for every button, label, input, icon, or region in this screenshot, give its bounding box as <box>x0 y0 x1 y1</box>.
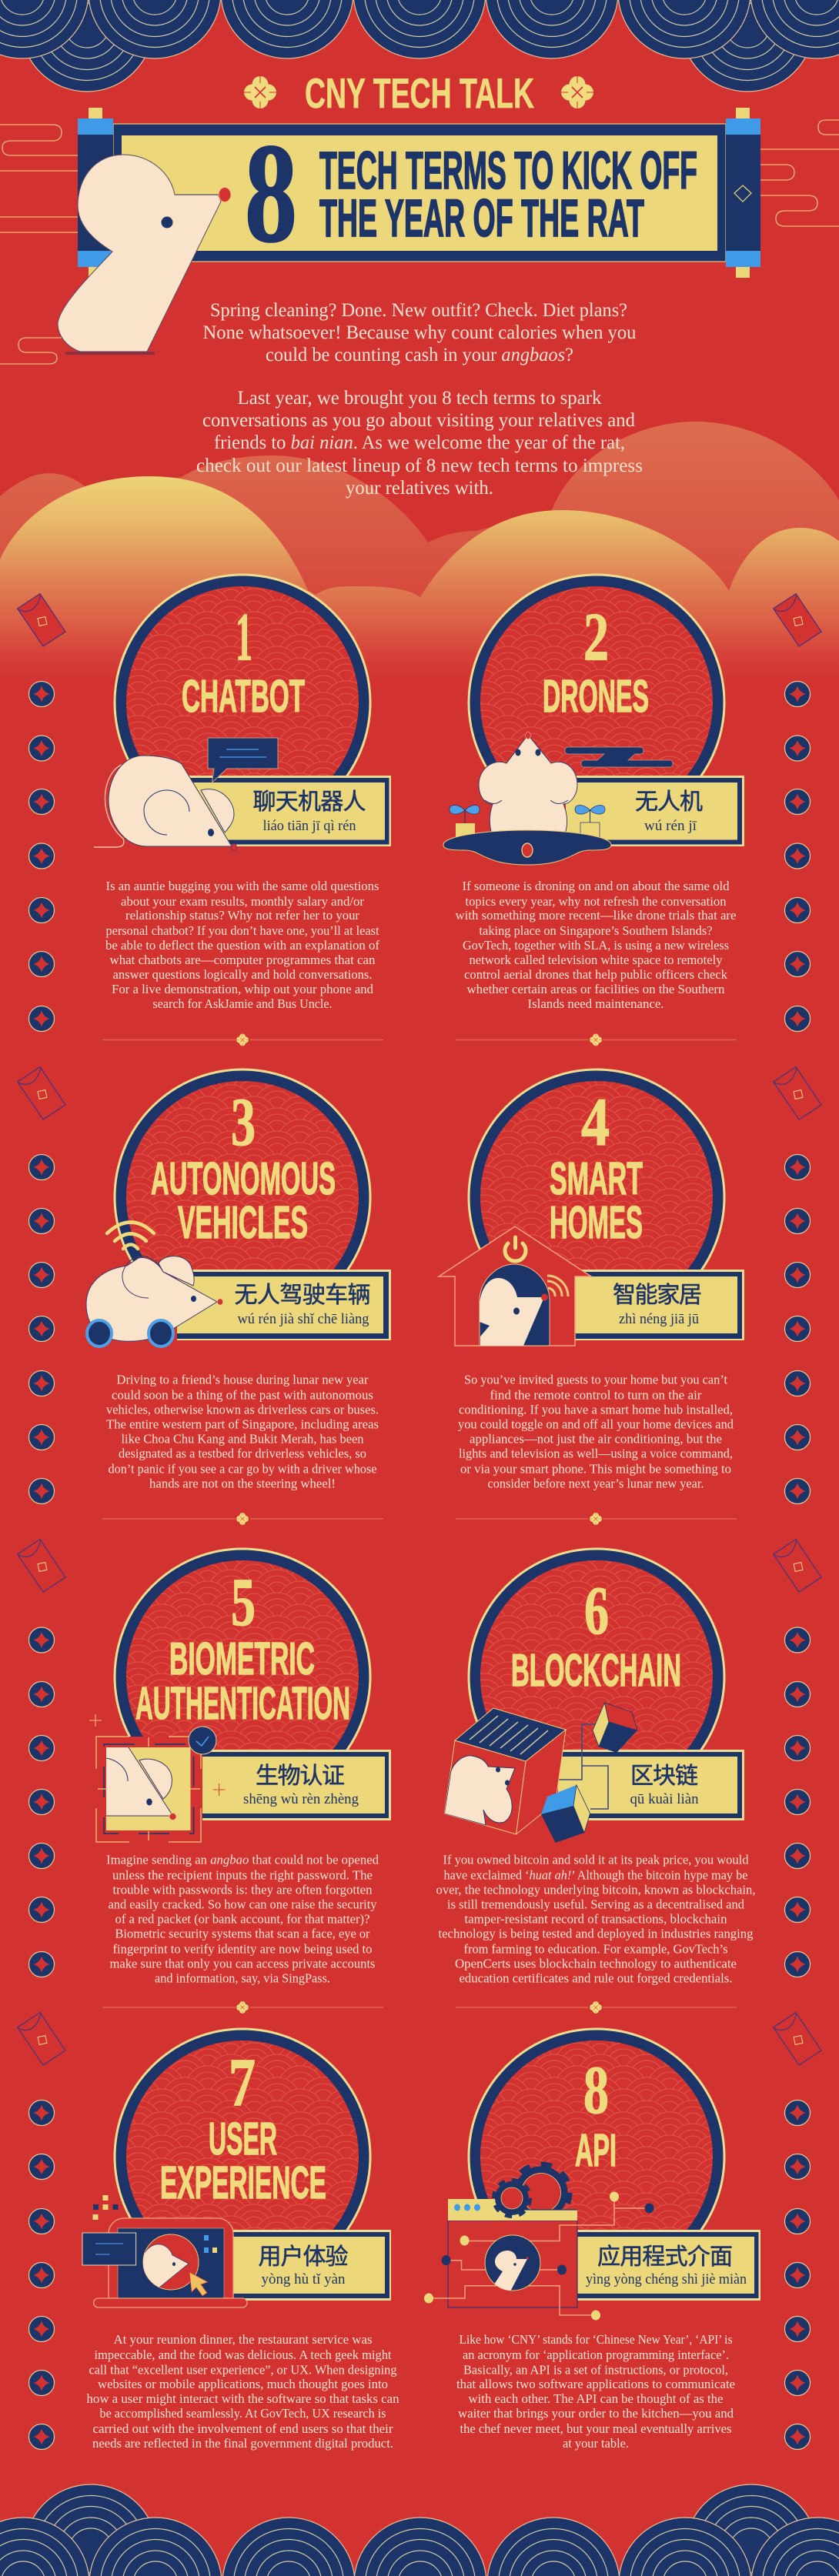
body text: answer questions logically and hold conversations. <box>112 967 373 982</box>
coin column left <box>29 682 54 2450</box>
body text: taking place on Singapore’s Southern Islands? <box>479 923 713 938</box>
body text: topics every year, why not refresh the conversation <box>465 894 727 909</box>
application window <box>448 2199 577 2307</box>
bottom scallop border <box>0 2484 839 2576</box>
main cube with rat <box>444 1708 566 1834</box>
body text: The entire western part of Singapore, including areas <box>106 1417 379 1431</box>
chinese label: 区块链 <box>630 1763 698 1789</box>
chat bubble <box>208 738 278 782</box>
body text: Driving to a friend’s house during lunar new year <box>117 1373 369 1386</box>
panel: 8 api <box>424 2029 760 2451</box>
intro paragraph 2 <box>196 386 643 499</box>
panel: 7 user experience <box>82 2029 399 2451</box>
screen dots <box>204 2235 217 2253</box>
body text: conditioning. If you have a smart home hub installed, <box>459 1402 733 1417</box>
divider row 1 <box>102 1034 737 1046</box>
chinese label: 无人驾驶车辆 <box>234 1283 371 1308</box>
body text: of a red packet (or bank account, for that matter)? <box>115 1911 369 1927</box>
body text: be accomplished seamlessly. At GovTech, UX research is <box>100 2406 386 2421</box>
body text: that allows two software applications to communicate <box>456 2377 735 2391</box>
heading <box>151 1153 336 1248</box>
body text: tamper-resistant record of transactions, blockchain <box>465 1911 727 1927</box>
intro paragraph 1: Spring cleaning? Done. New outfit? Check. Diet plans? <box>210 299 627 321</box>
badge circle <box>468 1548 725 1750</box>
red envelopes right <box>774 594 821 2065</box>
chinese label: yìng yòng chéng shì jiè miàn <box>586 2272 747 2287</box>
sparkle plus marks <box>89 1714 226 1796</box>
rat in circle <box>485 2235 540 2293</box>
heading: VEHICLES <box>178 1197 308 1248</box>
kicker text: CNY TECH TALK <box>305 69 534 117</box>
body text <box>105 879 379 1011</box>
body text: over, the technology underlying bitcoin, known as blockchain, <box>436 1882 756 1897</box>
panel: 6 blockchain <box>436 1549 756 1985</box>
background clouds <box>0 422 839 692</box>
circuit lines <box>429 2197 650 2315</box>
body text: be able to deflect the question with an explanation of <box>105 938 379 953</box>
badge circle <box>468 1068 725 1270</box>
body text: find the remote control to turn on the air <box>490 1388 702 1402</box>
red envelopes left <box>18 594 65 2065</box>
body text <box>86 2332 399 2451</box>
chinese label: wú rén jià shǐ chē liàng <box>237 1312 369 1327</box>
chinese label <box>566 776 744 846</box>
chinese label <box>558 1750 744 1820</box>
popup window <box>82 2233 136 2265</box>
heading: SMART <box>550 1153 643 1204</box>
body text: whether certain areas or facilities on the Southern <box>466 982 725 996</box>
body text: relationship status? Why not refer her to your <box>125 908 359 923</box>
body text: don’t panic if you see a car go by with a driver whose <box>108 1462 377 1476</box>
intro paragraph 2: check out our latest lineup of 8 new tech terms to impress <box>196 454 643 476</box>
heading <box>160 2114 326 2208</box>
chinese label <box>566 1270 744 1340</box>
body text: with something more recent—like drone trials that are <box>456 908 736 923</box>
propellers <box>450 805 605 837</box>
body text: carried out with the involvement of end users so that their <box>92 2421 393 2436</box>
chinese label: 聊天机器人 <box>252 789 366 815</box>
title scroll banner <box>78 108 760 278</box>
number: 5 <box>231 1565 256 1640</box>
body text: or via your smart phone. This might be something to <box>460 1462 731 1476</box>
heading: CHATBOT <box>182 671 305 722</box>
rat in doorway <box>480 1264 550 1346</box>
body text: Is an auntie bugging you with the same old questions <box>106 879 379 893</box>
body text: hands are not on the steering wheel! <box>149 1476 336 1491</box>
window dots <box>454 2204 480 2211</box>
body text: could soon be a thing of the past with autonomous <box>112 1388 373 1402</box>
heading: BIOMETRIC <box>169 1633 315 1684</box>
badge circle <box>114 2028 371 2230</box>
heading: HOMES <box>550 1197 643 1248</box>
drone stabiliser <box>565 747 673 767</box>
biometric scan frame <box>96 1727 216 1842</box>
heading: AUTONOMOUS <box>151 1153 336 1204</box>
body text: have exclaimed ‘huat ah!’ Although the bitcoin hype may be <box>443 1868 748 1882</box>
circuit nodes <box>424 2191 654 2321</box>
heading <box>550 1153 643 1248</box>
panel: 3 autonomous vehicles <box>86 1069 391 1491</box>
body text: control aerial drones that help public officers check <box>464 967 727 982</box>
body text: network called television white space to remotely <box>470 953 723 967</box>
body text: Islands need maintenance. <box>528 996 664 1011</box>
body text <box>106 1853 379 1985</box>
chinese label: liáo tiān jī qì rén <box>263 819 356 834</box>
body text: Biometric security systems that scan a face, eye or <box>115 1927 370 1940</box>
chinese label: 无人机 <box>635 789 703 815</box>
body text: needs are reflected in the final government digital product. <box>92 2436 393 2451</box>
intro paragraph 2: your relatives with. <box>346 476 493 499</box>
number: 8 <box>583 2053 609 2128</box>
body text: the chef never meet, but your meal eventually arrives <box>460 2421 731 2436</box>
chinese label: yòng hù tǐ yàn <box>262 2272 345 2287</box>
icon: power <box>505 1237 526 1261</box>
body text: unless the recipient inputs the right password. The <box>112 1868 373 1882</box>
rat car <box>86 1256 223 1346</box>
chinese label: 生物认证 <box>256 1763 345 1789</box>
body text: trouble with passwords is: they are often forgotten <box>112 1882 373 1897</box>
body text: what chatbots are—computer programmes that can <box>109 953 376 967</box>
chinese label <box>227 2230 391 2301</box>
body text: search for AskJamie and Bus Uncle. <box>152 996 333 1011</box>
drone body <box>443 830 611 865</box>
heading: AUTHENTICATION <box>135 1678 350 1729</box>
body text: technology is being tested and deployed in industries ranging <box>439 1927 754 1940</box>
wifi arcs <box>547 1276 568 1296</box>
intro paragraph 2: friends to bai nian. As we welcome the year of the rat, <box>214 431 625 453</box>
small block top <box>593 1703 637 1753</box>
chinese label: qū kuài liàn <box>630 1792 699 1807</box>
rat mascot <box>94 756 237 851</box>
badge circle <box>114 1068 371 1270</box>
chinese label: 用户体验 <box>259 2244 348 2270</box>
body text <box>456 879 736 1011</box>
chinese label: wú rén jī <box>644 819 697 834</box>
intro paragraph 1: None whatsoever! Because why count calories when you <box>203 321 637 343</box>
heading: EXPERIENCE <box>160 2157 326 2208</box>
connector lines <box>541 1724 608 1809</box>
coin column right <box>785 682 810 2450</box>
badge circle <box>114 574 371 776</box>
panel: 1 chatbot <box>94 575 391 1011</box>
rat on cube <box>444 1756 515 1825</box>
body text: how a user might interact with the software so that tasks can <box>86 2391 399 2406</box>
body text: If someone is droning on and on about the same old <box>462 879 730 893</box>
small block bottom <box>541 1785 590 1843</box>
top scallop border <box>0 0 839 92</box>
body text: consider before next year’s lunar new year. <box>488 1476 704 1491</box>
chinese label: zhì néng jiā jū <box>619 1312 699 1327</box>
right roller <box>726 108 760 278</box>
body text: impeccable, and the food was delicious. A tech geek might <box>94 2347 392 2362</box>
body text <box>458 1373 734 1491</box>
divider row 3 <box>102 2001 737 2014</box>
panel: 1 chatbot: 1 <box>236 600 252 676</box>
chinese label <box>570 2230 760 2301</box>
badge circle <box>468 574 725 776</box>
body text: fingerprint to verify identity are now being used to <box>112 1942 373 1956</box>
decorative cloud lines left and right <box>0 120 839 364</box>
body text: OpenCerts uses blockchain technology to authenticate <box>455 1956 737 1971</box>
body text: Like how ‘CNY’ stands for ‘Chinese New Year’, ‘API’ is <box>459 2332 733 2347</box>
badge circle <box>114 1548 371 1750</box>
cursor <box>189 2272 208 2296</box>
number: 2 <box>583 600 609 676</box>
body text: waiter that brings your order to the kitchen—you and <box>458 2406 734 2421</box>
body text: with each other. The API can be thought of as the <box>468 2391 724 2406</box>
body text: and information, say, via SingPass. <box>155 1971 330 1985</box>
body text: make sure that only you can access private accounts <box>109 1956 376 1971</box>
divider row 2 <box>102 1513 737 1525</box>
laptop with rat <box>82 2218 247 2307</box>
panel: 2 drones <box>443 575 744 1011</box>
left roller <box>78 108 113 278</box>
body text: vehicles, otherwise known as driverless cars or buses. <box>106 1402 379 1417</box>
body text: At your reunion dinner, the restaurant service was <box>114 2332 373 2347</box>
body text: like Choa Chu Kang and Bukit Merah, has been <box>122 1431 364 1446</box>
intro paragraph 1 <box>203 299 637 365</box>
chinese label: 智能家居 <box>613 1283 702 1308</box>
wheels <box>87 1320 173 1346</box>
body text: So you’ve invited guests to your home but you can’t <box>464 1373 727 1386</box>
heading: API <box>575 2125 617 2176</box>
body text <box>436 1853 756 1985</box>
house <box>439 1226 591 1346</box>
heading: DRONES <box>543 671 649 722</box>
rat face <box>106 1747 176 1820</box>
body text: education certificates and rule out forged credentials. <box>459 1971 733 1985</box>
body text: call that “excellent user experience”, or UX. When designing <box>89 2362 397 2377</box>
kicker: CNY Tech Talk <box>244 69 593 117</box>
icon: verified check <box>189 1727 216 1754</box>
icon: flower right <box>561 76 593 108</box>
chinese label: shēng wù rèn zhèng <box>243 1792 359 1807</box>
screen rat <box>139 2234 199 2290</box>
scroll centre <box>113 124 726 262</box>
number: 6 <box>584 1573 609 1649</box>
heading: USER <box>209 2114 277 2164</box>
wifi signal <box>107 1222 154 1249</box>
chinese label <box>202 1750 391 1820</box>
title text <box>319 141 697 248</box>
body text: designated as a testbed for driverless vehicles, so <box>119 1446 366 1460</box>
body text: Basically, an API is a set of instructions, or protocol, <box>463 2362 728 2377</box>
body text: For a live demonstration, whip out your phone and <box>112 982 373 996</box>
panel: 4 smart homes <box>439 1069 744 1491</box>
panel: 5 biometric authentication <box>89 1549 391 1985</box>
body text: about your exam results, monthly salary and/or <box>121 894 364 909</box>
number: 3 <box>231 1085 256 1160</box>
icon: large gear <box>513 2164 570 2221</box>
pixel dots <box>92 2195 119 2220</box>
body text: If you owned bitcoin and sold it at its peak price, you would <box>443 1853 749 1867</box>
title rat mascot <box>58 155 231 353</box>
chinese label <box>185 776 391 846</box>
body text: an acronym for ‘application programming interface’. <box>463 2347 729 2362</box>
intro paragraph 2: conversations as you go about visiting your relatives and <box>202 409 635 431</box>
heading <box>135 1633 350 1729</box>
icon: flower left <box>244 76 276 108</box>
body text: lights and television as well—using a voice command, <box>459 1446 733 1460</box>
intro paragraph 2: Last year, we brought you 8 tech terms to spark <box>237 386 602 409</box>
number: 7 <box>229 2045 256 2121</box>
chinese label: 应用程式介面 <box>597 2244 733 2270</box>
body text <box>106 1373 379 1491</box>
body text: appliances—not just the air conditioning, but the <box>470 1431 722 1446</box>
body text: you could toggle on and off all your home devices and <box>458 1417 734 1431</box>
body text: websites or mobile applications, much thought goes into <box>98 2377 388 2391</box>
body text: at your table. <box>563 2436 629 2451</box>
chinese label <box>177 1270 391 1340</box>
body text: Imagine sending an angbao that could not be opened <box>106 1853 379 1867</box>
icon: small gear <box>494 2181 530 2216</box>
number: 4 <box>581 1085 610 1160</box>
body text: GovTech, together with SLA, is using a new wireless <box>463 938 729 953</box>
heading: BLOCKCHAIN <box>511 1645 681 1696</box>
intro paragraph 1: could be counting cash in your angbaos? <box>266 343 573 365</box>
body text: personal chatbot? If you don’t have one, you’ll at least <box>106 923 379 938</box>
rat mascot from behind <box>479 732 577 837</box>
body text: is still tremendously useful. Serving as a decentralised and <box>447 1897 744 1911</box>
big number 8: 8 <box>245 115 297 272</box>
body text: and easily cracked. So how can one raise the security <box>108 1897 377 1911</box>
body text <box>456 2332 735 2451</box>
body text: from farming to education. For example, GovTech’s <box>463 1942 728 1956</box>
badge circle <box>468 2028 725 2230</box>
